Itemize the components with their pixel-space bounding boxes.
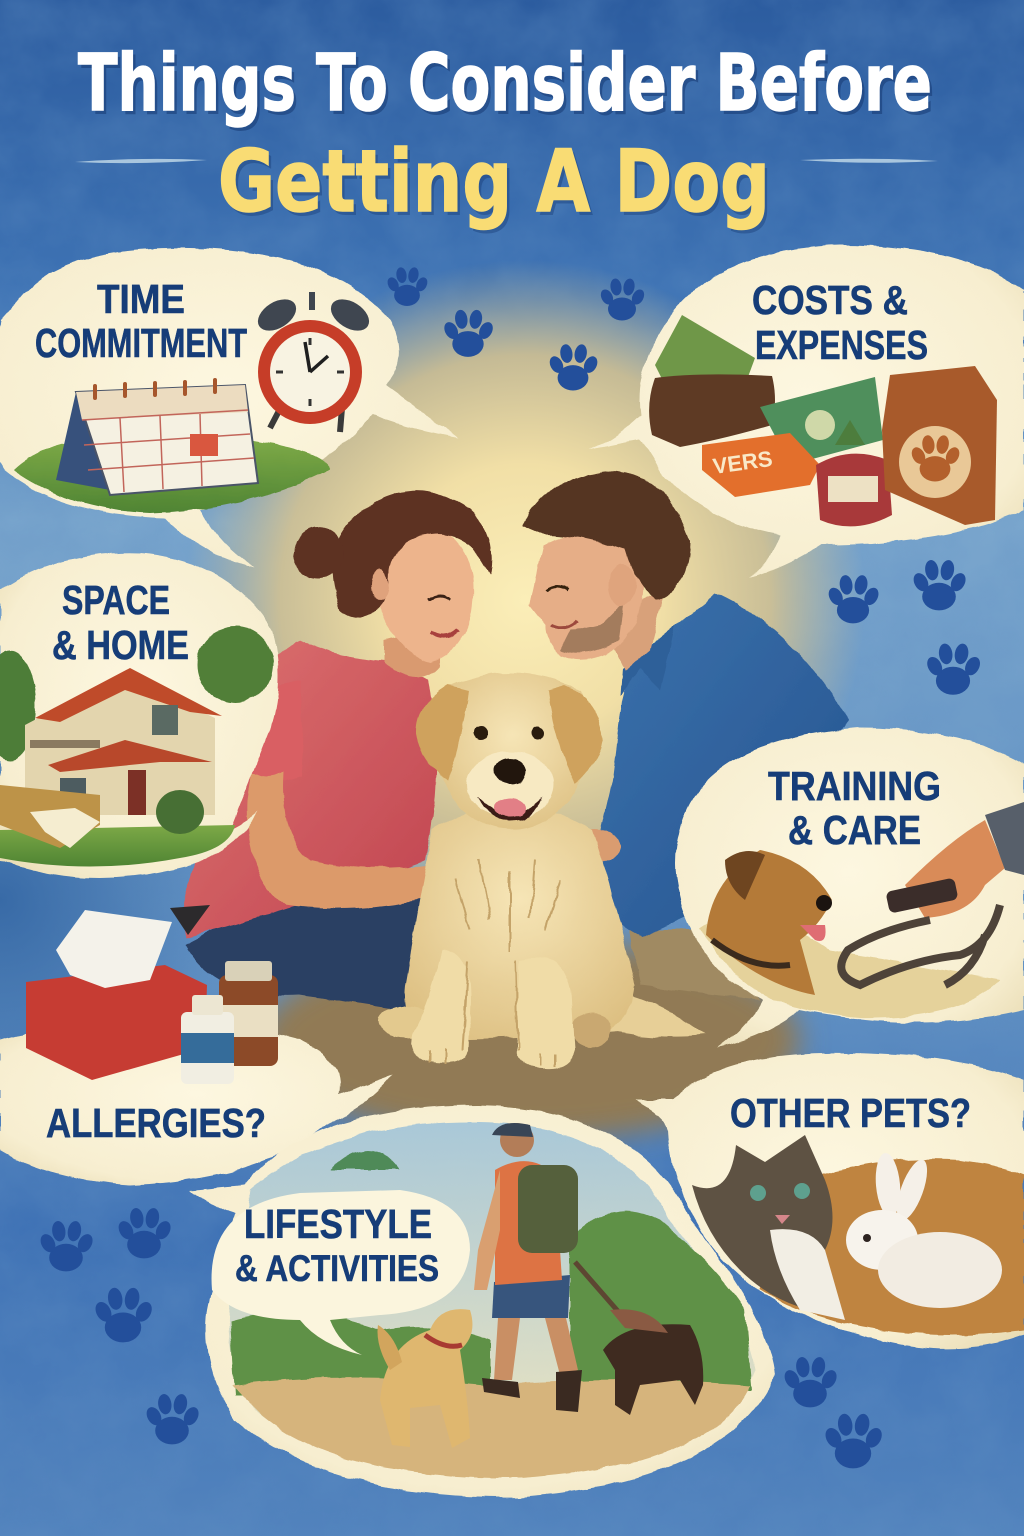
icon: cat	[692, 1135, 845, 1320]
woman	[182, 491, 492, 1015]
arrow mark	[30, 808, 100, 848]
icon: rabbit	[846, 1152, 1002, 1308]
heading: costs and expenses: COSTS &	[752, 277, 908, 323]
central illustration: couple and puppy	[182, 470, 850, 1068]
title	[75, 39, 938, 236]
small dark pointer	[170, 905, 210, 935]
icon: leash	[841, 905, 1000, 985]
icon: treat box	[702, 433, 820, 497]
heading: space and home	[52, 577, 189, 668]
heading: training and care: & CARE	[788, 807, 921, 853]
title: Getting A Dog	[221, 136, 773, 236]
scene: trail landscape	[228, 1122, 755, 1478]
bubble: allergies	[0, 910, 393, 1185]
heading: time commitment: COMMITMENT	[35, 320, 247, 366]
icon: calendar	[56, 380, 258, 495]
bubble: other pets	[635, 1053, 1024, 1349]
bubble: time commitment	[0, 248, 458, 568]
icon: alarm clock	[252, 292, 375, 432]
icon: medicine bottles	[181, 961, 278, 1084]
bubble: lifestyle and activities	[190, 1105, 775, 1497]
icon: dog food bag	[882, 366, 997, 525]
heading: space and home: SPACE	[62, 577, 170, 623]
heading: space and home: & HOME	[52, 622, 189, 668]
heading: training and care	[768, 763, 941, 853]
man	[522, 470, 850, 1000]
icon: house	[0, 668, 235, 866]
icon: hand with clicker	[885, 802, 1024, 918]
heading: time commitment	[35, 276, 247, 366]
icon: dog	[706, 850, 832, 995]
heading: allergies: ALLERGIES?	[46, 1100, 266, 1146]
puppy	[378, 672, 705, 1068]
icon: pot	[816, 420, 892, 526]
icon: fence	[0, 785, 100, 848]
callout: lifestyle and activities: & ACTIVITIES	[235, 1248, 439, 1289]
title: Getting A Dog	[218, 132, 770, 232]
figure: dark dog	[575, 1262, 703, 1415]
callout: lifestyle and activities: LIFESTYLE	[244, 1201, 432, 1247]
bubble: training and care	[675, 728, 1024, 1048]
bubble: space and home	[0, 553, 278, 878]
heading: costs and expenses	[752, 277, 928, 368]
heading: other pets: OTHER PETS?	[730, 1090, 971, 1136]
icon: tissue box	[26, 910, 207, 1080]
icon: treat box: VERS	[711, 446, 774, 479]
callout: lifestyle and activities	[212, 1190, 470, 1355]
figure: golden dog	[378, 1309, 472, 1448]
paw prints	[38, 267, 983, 1468]
heading: training and care: TRAINING	[768, 763, 941, 809]
bubble: costs and expenses	[590, 245, 1024, 578]
figure: hiker	[474, 1123, 582, 1412]
icon: money and wallet	[649, 315, 883, 465]
icon: trees	[0, 627, 273, 760]
heading: costs and expenses: EXPENSES	[755, 322, 928, 368]
heading: time commitment: TIME	[97, 276, 185, 322]
